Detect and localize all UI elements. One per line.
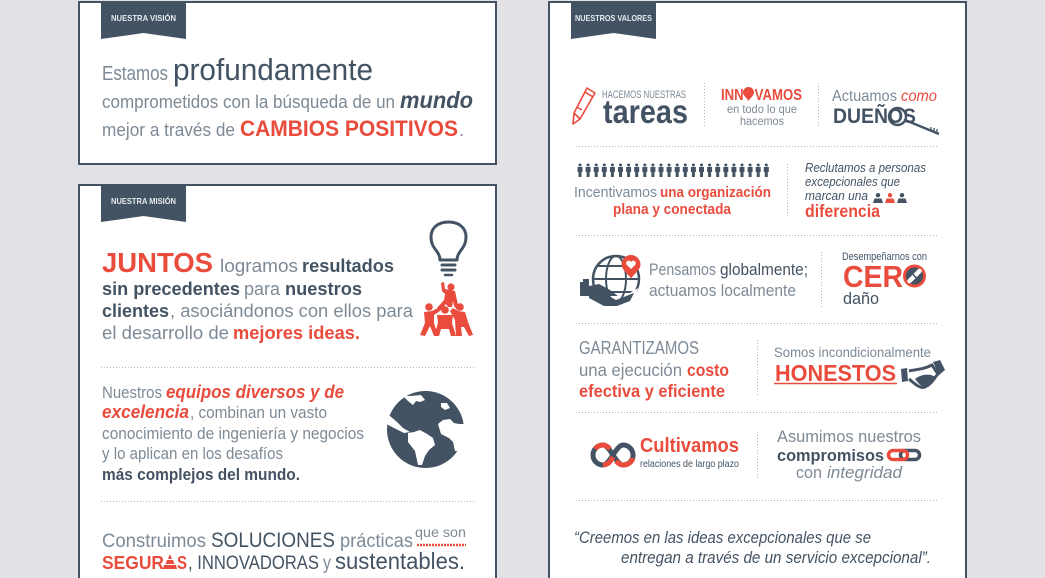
vision statement text: comprometidos con la búsqueda de un (102, 91, 395, 112)
value: asumimos compromisos (777, 427, 921, 482)
mission text: juntos: el desarrollo de (102, 322, 229, 343)
mission text: equipos diversos (102, 382, 364, 484)
mission text: juntos: nuestros (285, 279, 362, 299)
mission text: juntos: JUNTOS (102, 247, 213, 278)
mission text: soluciones: Construimos (102, 531, 206, 552)
value: garantizamos ejecución: costo (687, 360, 729, 380)
ribbon heading: nuestra misión: NUESTRA MISIÓN (111, 195, 176, 206)
ribbon heading: nuestros valores: NUESTROS VALORES (575, 13, 652, 23)
value: hacemos nuestras tareas: tareas (603, 93, 688, 130)
value: pensamos globalmente: globalmente; (720, 261, 808, 279)
divider (576, 234, 937, 236)
value: cero daño: Desempeñarnos con (842, 251, 927, 263)
icon row: 24 people (578, 164, 769, 177)
icon: safety cone (163, 554, 177, 569)
value: pensamos globalmente (649, 261, 808, 300)
vision statement text: mundo (400, 87, 473, 113)
icon: earth globe (384, 391, 472, 468)
value: innovamos: en todo lo que (727, 102, 797, 116)
value: organización plana: plana y conectada (613, 202, 732, 218)
mission text: soluciones: y (323, 553, 331, 574)
mission text: soluciones (102, 524, 466, 574)
value: innovamos: hacemos (740, 114, 784, 128)
value: cultivamos: relaciones de largo plazo (640, 459, 739, 470)
icon: handshake (901, 360, 945, 387)
ribbon heading: nuestra visión: NUESTRA VISIÓN (111, 12, 176, 23)
mission text: juntos: para (244, 278, 281, 299)
divider (756, 432, 758, 480)
icon: light bulb (431, 222, 466, 275)
mission text: juntos: resultados (302, 256, 394, 276)
vision statement text: CAMBIOS POSITIVOS (240, 116, 458, 141)
divider (101, 500, 474, 502)
divider (576, 500, 937, 502)
value: cero daño: CER (843, 259, 903, 294)
icon: team of people lifting (420, 282, 473, 336)
divider (576, 146, 937, 148)
hatched underline (417, 544, 466, 546)
quote: “Creemos en las ideas excepcionales que se (574, 529, 871, 547)
vision statement text: . (459, 119, 464, 140)
vision statement text: mejor a través de (102, 119, 235, 140)
value: cero daño (842, 251, 927, 308)
icon: key (889, 108, 939, 134)
mission text: juntos: mejores ideas. (233, 323, 360, 343)
value: cero daño: daño (843, 289, 879, 308)
value: asumimos compromisos: compromisos (777, 447, 884, 465)
value: honestos (774, 344, 945, 387)
mission text: soluciones: SEGUR (102, 552, 164, 573)
value: organización plana: una organización (660, 185, 771, 201)
mission text: soluciones: SOLUCIONES (211, 529, 335, 552)
divider (101, 366, 474, 368)
mission text: soluciones: S (177, 552, 187, 573)
value: pensamos globalmente: actuamos localmente (649, 282, 796, 300)
mission text: juntos (102, 247, 414, 343)
value: actuamos como dueños (832, 88, 939, 134)
value: actuamos como dueños: DUEÑOS (833, 105, 916, 128)
divider (704, 83, 818, 127)
quote: entregan a través de un servicio excepcional”. (621, 549, 931, 567)
icon: globe in hand with heart pin (580, 255, 640, 311)
value: pensamos globalmente: Pensamos (649, 261, 716, 279)
mission text: juntos: sin precedentes (102, 279, 240, 299)
icon: idea pin (743, 87, 754, 101)
value: reclutamos personas: diferencia (805, 201, 880, 221)
value: reclutamos personas: marcan una (805, 189, 868, 203)
value: cultivamos: Cultivamos (640, 435, 739, 457)
value: organización plana (574, 184, 771, 218)
icon: chain link (888, 450, 920, 460)
vision statement text (102, 52, 473, 141)
divider (820, 252, 822, 307)
value: honestos: Somos incondicionalmente (774, 344, 931, 360)
mission text: soluciones: prácticas (340, 531, 413, 552)
mission text: equipos diversos: , combinan un vasto (190, 403, 327, 422)
value: honestos: HONESTOS (775, 360, 896, 386)
value: garantizamos ejecución: efectiva y eficiente (579, 381, 725, 401)
value: hacemos nuestras tareas: HACEMOS NUESTRAS (602, 89, 686, 101)
mission text: equipos diversos: y lo aplican en los desafíos (102, 444, 283, 463)
value: actuamos como dueños: Actuamos (832, 88, 897, 105)
value: innovamos (721, 87, 802, 128)
divider (576, 412, 937, 414)
divider (756, 340, 758, 395)
panel: nuestra misión (79, 185, 496, 578)
mission text: equipos diversos: conocimiento de ingeniería y negocios (102, 424, 364, 443)
ribbon heading: nuestra misión (101, 186, 186, 222)
mission text: soluciones: , INNOVADORAS (188, 552, 319, 574)
value: organización plana: Incentivamos (574, 184, 657, 201)
value: garantizamos ejecución: una ejecución (579, 360, 682, 380)
value: reclutamos personas: Reclutamos a personas (805, 161, 926, 175)
quote (574, 529, 931, 567)
mission text: soluciones: que son (415, 524, 466, 540)
vision statement text: Estamos (102, 63, 168, 85)
value: actuamos como dueños: como (901, 88, 937, 105)
mission text: juntos: logramos (220, 255, 298, 276)
divider (576, 322, 937, 324)
icon: three people (873, 193, 907, 203)
value: asumimos compromisos: con (796, 463, 822, 482)
mission text: equipos diversos: Nuestros (102, 383, 162, 402)
ribbon heading: nuestra visión (101, 3, 186, 39)
mission text: equipos diversos: equipos diversos y de (166, 382, 344, 402)
value: innovamos: INN VAMOS (721, 87, 802, 104)
divider (786, 164, 788, 218)
panel: nuestra visión (79, 2, 496, 164)
icon: bandage in o (904, 266, 924, 286)
vision statement text: profundamente (173, 52, 373, 87)
mission text: equipos diversos: excelencia (102, 402, 189, 422)
icon: infinity loop (593, 445, 633, 465)
value: asumimos compromisos: Asumimos nuestros (777, 427, 921, 446)
value: garantizamos ejecución (579, 338, 729, 401)
value: cultivamos (640, 435, 739, 470)
panel: nuestros valores (549, 2, 966, 578)
mission text: soluciones: sustentables. (335, 548, 465, 574)
icon: pencil (573, 88, 595, 124)
value: asumimos compromisos: integridad (827, 463, 903, 482)
mission text: equipos diversos: más complejos del mundo. (102, 466, 300, 484)
mission text: juntos: , asociándonos con ellos para (170, 300, 414, 321)
value: garantizamos ejecución: GARANTIZAMOS (579, 338, 699, 358)
ribbon heading: nuestros valores (571, 3, 656, 39)
value: reclutamos personas (805, 161, 926, 221)
value: reclutamos personas: excepcionales que (805, 175, 900, 189)
mission text: juntos: clientes (102, 301, 169, 321)
